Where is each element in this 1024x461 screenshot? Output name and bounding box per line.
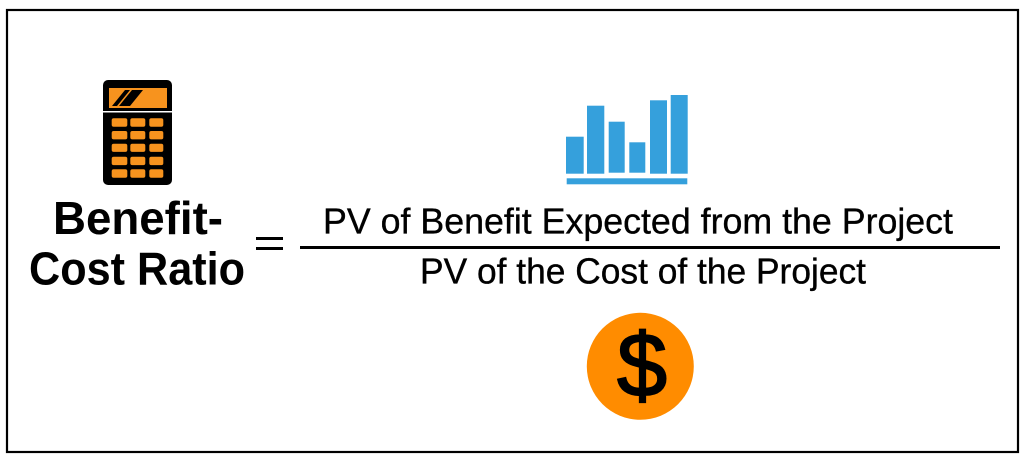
numerator: PV of benefit: PV of Benefit Expected from the Project	[323, 200, 953, 241]
equals sign	[256, 237, 283, 250]
title: Benefit-Cost Ratio: Cost Ratio	[29, 242, 245, 294]
icon: dollar coin: $	[617, 316, 667, 416]
icon: calculator	[103, 80, 172, 185]
icon: dollar coin	[587, 313, 694, 420]
fraction line	[300, 246, 1000, 249]
title: Benefit-Cost Ratio	[29, 192, 245, 294]
icon: bar chart	[566, 95, 688, 184]
denominator: PV of cost: PV of the Cost of the Project	[420, 250, 866, 292]
title: Benefit-Cost Ratio: Benefit-	[53, 192, 223, 244]
